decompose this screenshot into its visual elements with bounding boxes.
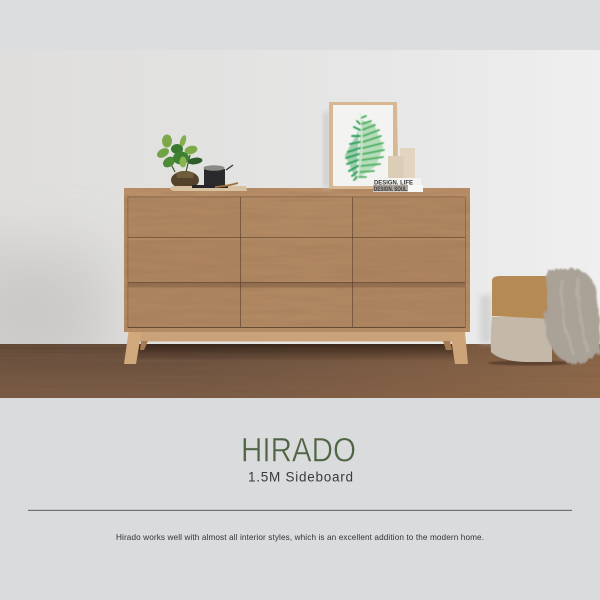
fur throw	[545, 268, 600, 364]
basket shadow	[480, 295, 492, 343]
candles	[388, 148, 415, 179]
wood grain texture	[124, 188, 470, 328]
wooden floor	[0, 344, 600, 398]
lower panel	[0, 398, 600, 600]
basket lower band	[491, 317, 552, 362]
description: Hirado works well with almost all interior styles, which is an excellent addition to the modern home.	[116, 533, 484, 542]
title: HIRADO	[241, 432, 356, 470]
stacked books	[373, 178, 423, 193]
leaves	[155, 134, 203, 172]
brass vase	[171, 171, 199, 189]
black pot	[192, 165, 238, 188]
subtitle: 1.5M Sideboard	[248, 470, 353, 484]
drawer row 3	[128, 288, 465, 327]
drawer gap lines	[128, 196, 466, 328]
right leg	[450, 332, 468, 364]
palm leaf	[345, 113, 384, 181]
basket with fur throw	[480, 268, 600, 364]
potted plant	[155, 134, 247, 191]
left leg	[124, 332, 142, 364]
back legs	[140, 341, 452, 350]
frame	[329, 102, 398, 189]
sideboard carcass	[124, 192, 470, 332]
product photo	[0, 50, 600, 398]
divider	[28, 510, 572, 511]
stacked books: DESIGN. SOUL	[374, 187, 407, 193]
wall	[0, 50, 600, 344]
frame shadow	[324, 112, 329, 188]
base rail	[140, 332, 452, 342]
sideboard	[124, 188, 470, 364]
top band	[0, 0, 600, 50]
drawer row 2	[128, 240, 465, 282]
top board	[124, 188, 470, 196]
tray	[170, 186, 247, 191]
stacked books: DESIGN. LIFE	[374, 180, 414, 186]
print	[333, 105, 393, 186]
jute basket top	[492, 276, 552, 319]
drawer row 1	[128, 197, 465, 238]
framed leaf print	[324, 102, 398, 189]
